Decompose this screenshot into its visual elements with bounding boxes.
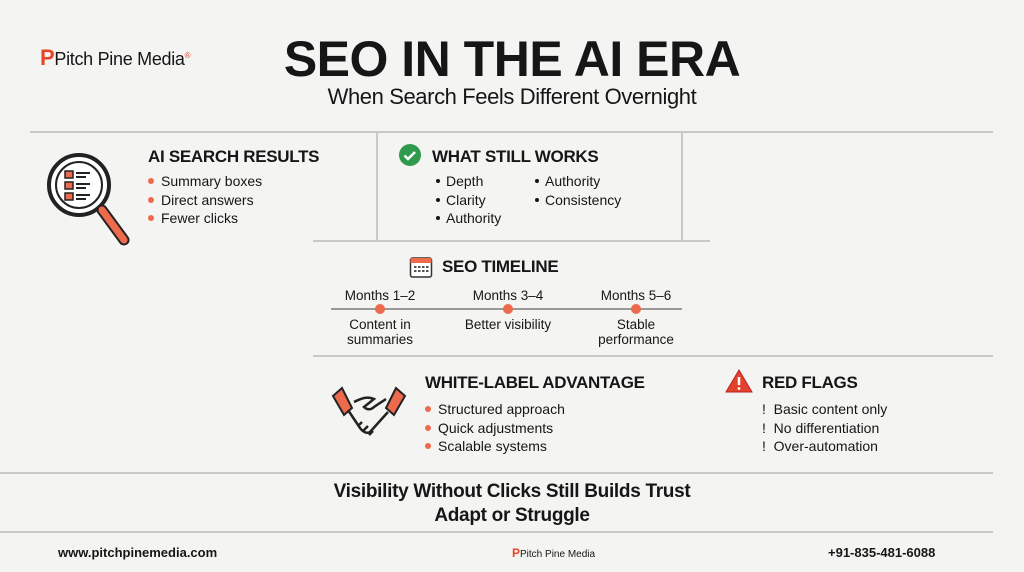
closing message: [334, 481, 690, 526]
panel: AI search results: AI SEARCH RESULTS: [148, 147, 319, 166]
timeline: [331, 288, 682, 347]
footer url: www.pitchpinemedia.com: [58, 545, 217, 560]
text: performance: [598, 332, 674, 347]
icon: calendar: [410, 257, 432, 278]
panel: white-label advantage: Scalable systems: [438, 438, 547, 454]
panel: what still works: WHAT STILL WORKS: [432, 147, 598, 166]
panel: AI search results: [148, 147, 319, 226]
text: Content in: [349, 317, 411, 332]
panel: white-label advantage: Quick adjustments: [438, 420, 553, 436]
panel: AI search results: Fewer clicks: [161, 210, 238, 226]
subtitle: When Search Feels Different Overnight: [328, 84, 696, 109]
text: Stable: [617, 317, 655, 332]
text: Authority: [446, 210, 501, 226]
panel: red flags: [762, 373, 888, 454]
panel: red flags: ! Basic content only: [762, 401, 887, 417]
panel: red flags: ! No differentiation: [762, 420, 879, 436]
footer phone: +91-835-481-6088: [828, 545, 935, 560]
logo: PPitch Pine Media®: [40, 45, 190, 70]
footer logo: PPitch Pine Media: [512, 546, 595, 560]
panel: white-label advantage: Structured approach: [438, 401, 565, 417]
text: Months 5–6: [601, 288, 671, 303]
text: Months 1–2: [345, 288, 415, 303]
text: Months 3–4: [473, 288, 543, 303]
heading: SEO timeline: SEO TIMELINE: [442, 257, 558, 276]
panel: AI search results: Summary boxes: [161, 173, 262, 189]
panel: AI search results: Direct answers: [161, 192, 254, 208]
text: Authority: [545, 173, 600, 189]
panel: red flags: RED FLAGS: [762, 373, 858, 392]
panel: red flags: ! Over-automation: [762, 438, 878, 454]
text: Consistency: [545, 192, 621, 208]
text: Better visibility: [465, 317, 551, 332]
closing message: Adapt or Struggle: [434, 505, 590, 526]
panel: white-label advantage: WHITE-LABEL ADVANTAGE: [425, 373, 645, 392]
text: summaries: [347, 332, 413, 347]
title: SEO IN THE AI ERA: [284, 31, 740, 87]
text: Clarity: [446, 192, 486, 208]
icon: handshake: [332, 386, 406, 436]
text: Depth: [446, 173, 483, 189]
icon: magnifier: [47, 153, 130, 246]
icon: check: [399, 144, 421, 166]
closing message: Visibility Without Clicks Still Builds Trust: [334, 481, 690, 502]
panel: white-label advantage: [425, 373, 645, 454]
icon: warning: [725, 369, 753, 392]
